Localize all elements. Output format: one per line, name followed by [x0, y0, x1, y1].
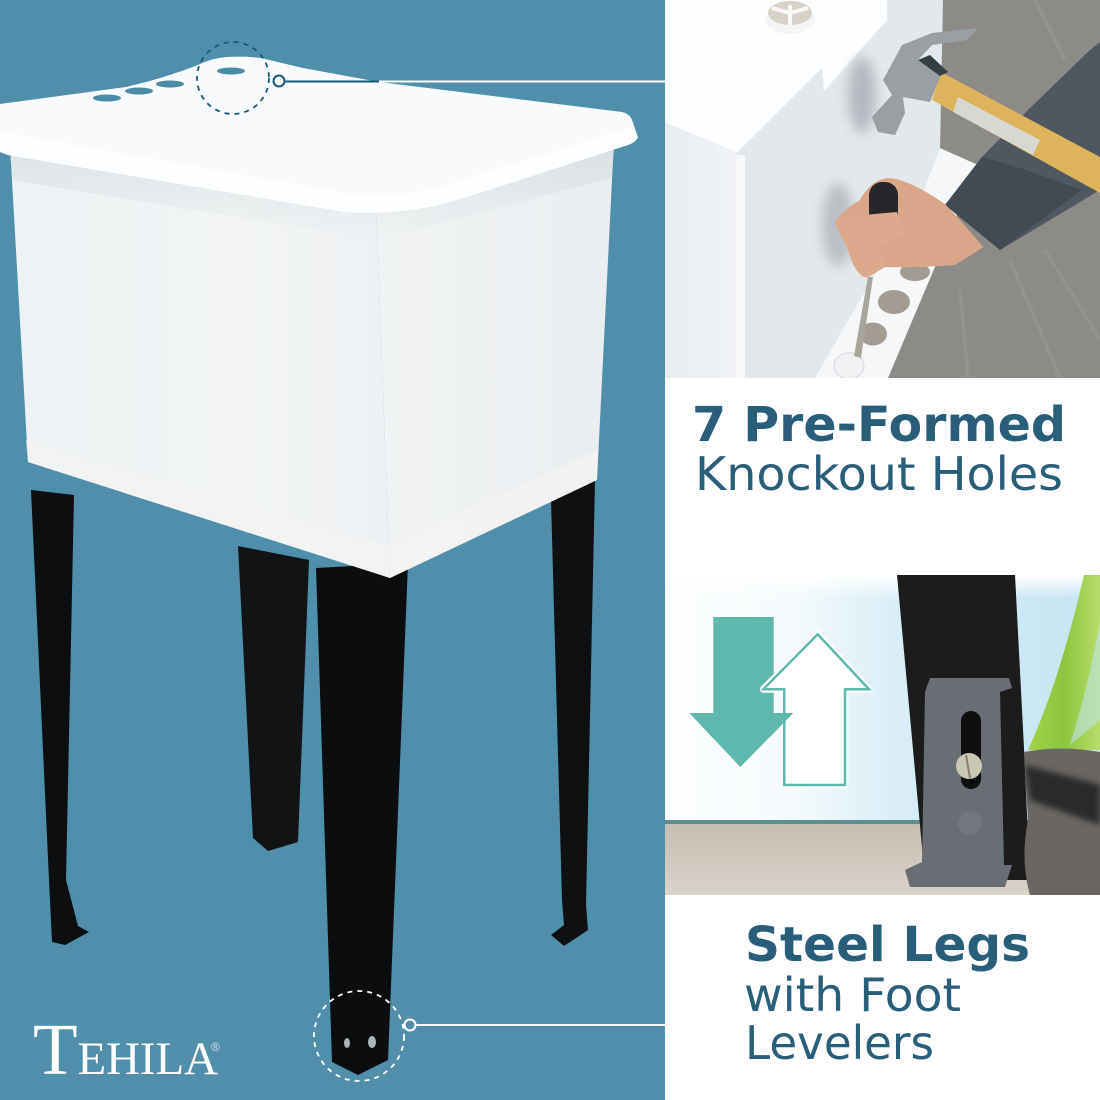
hand shadow: [822, 183, 854, 267]
screwdriver handle: [869, 182, 898, 215]
black steel leg: [897, 575, 1030, 880]
heading regular line: Knockout Holes: [695, 447, 1063, 501]
drain opening: [768, 1, 812, 25]
callout: knockout holes: [197, 42, 665, 114]
heading: 7 pre-formed knockout holes: [692, 397, 1066, 501]
white right column: [665, 0, 1100, 1100]
wall shadows: [848, 57, 876, 133]
handle label: [953, 97, 1040, 155]
up arrow halo: [763, 634, 869, 785]
white base flange with holes: [815, 148, 978, 379]
heading bold line: Steel Legs: [745, 917, 1030, 973]
dashed circle around hole: [197, 42, 269, 114]
dashed circle around foot: [314, 991, 404, 1081]
wood floor: [665, 0, 1100, 378]
sink tub right face: [376, 140, 614, 578]
faucet holes: [93, 68, 245, 102]
down arrow tip overlap: [770, 713, 793, 737]
front leg bolts: [344, 1036, 376, 1048]
bracket slot: [961, 711, 981, 789]
corner highlight: [737, 155, 745, 378]
callout node: [404, 1020, 416, 1030]
heading regular line two: Levelers: [745, 1016, 934, 1070]
heading bold line: 7 Pre-Formed: [692, 397, 1066, 453]
heading: steel legs with foot levelers: [744, 917, 1030, 1070]
plastic foot bracket: [905, 678, 1012, 887]
punched knockout disc: [834, 353, 864, 379]
sink right wall: [737, 0, 943, 378]
photo: hammer and screwdriver punching knockout: [665, 0, 1100, 379]
hammer neck: [918, 55, 948, 76]
callout node: [274, 76, 284, 86]
logo wordmark: TEHILA: [33, 1009, 218, 1090]
floor planks: [960, 0, 1100, 378]
callout line dark: [285, 80, 379, 82]
brand logo: [33, 1009, 220, 1090]
back center leg: [238, 546, 309, 851]
down arrow: [689, 617, 793, 767]
fingers over the handle: [835, 212, 898, 277]
icon: up and down adjustment arrows: [689, 617, 869, 785]
green plant blur: [1028, 575, 1100, 750]
teal background panel: [0, 0, 665, 1100]
leveling screw: [956, 753, 982, 779]
grey cloth: [1024, 748, 1100, 895]
horizon line: [665, 820, 1028, 824]
front leg: [316, 563, 408, 1075]
screwdriver shaft: [854, 277, 873, 358]
sink left wall: [665, 123, 737, 378]
tub bottom band: [26, 440, 598, 578]
back left leg: [31, 490, 89, 945]
up arrow outline: [763, 634, 869, 785]
shadow under rim: [10, 148, 614, 240]
sink tub left face: [10, 145, 390, 578]
sleeve: [945, 42, 1100, 250]
flange strip: [815, 148, 978, 378]
blurred backdrop: [753, 578, 1100, 820]
callout line: [416, 1024, 665, 1026]
drain spokes: [772, 5, 808, 25]
table surface: [665, 824, 1030, 895]
photo: foot leveler closeup: [665, 575, 1100, 895]
screw slot: [966, 755, 970, 778]
callout: foot levelers: [314, 991, 665, 1081]
sink top surface: [665, 0, 887, 153]
plant sky gap: [1070, 620, 1100, 745]
drain fitting: [765, 1, 815, 34]
hand: [835, 178, 983, 277]
cloth dark fold: [1025, 765, 1100, 825]
rim front lip: [0, 128, 638, 213]
right leg: [551, 480, 595, 946]
top white band: [755, 575, 1084, 596]
registered mark: ®: [211, 1040, 220, 1054]
drain collar: [765, 14, 815, 34]
sink rim top: [0, 57, 638, 213]
hammer head: [872, 28, 978, 135]
callout line white: [379, 80, 665, 82]
heading regular line one: with Foot: [744, 968, 961, 1022]
product: utility sink with steel legs: [0, 57, 638, 1075]
dark cuff: [945, 157, 1082, 250]
lower rivet: [958, 811, 982, 835]
flange holes: [859, 263, 930, 346]
hammer handle: [932, 72, 1100, 193]
